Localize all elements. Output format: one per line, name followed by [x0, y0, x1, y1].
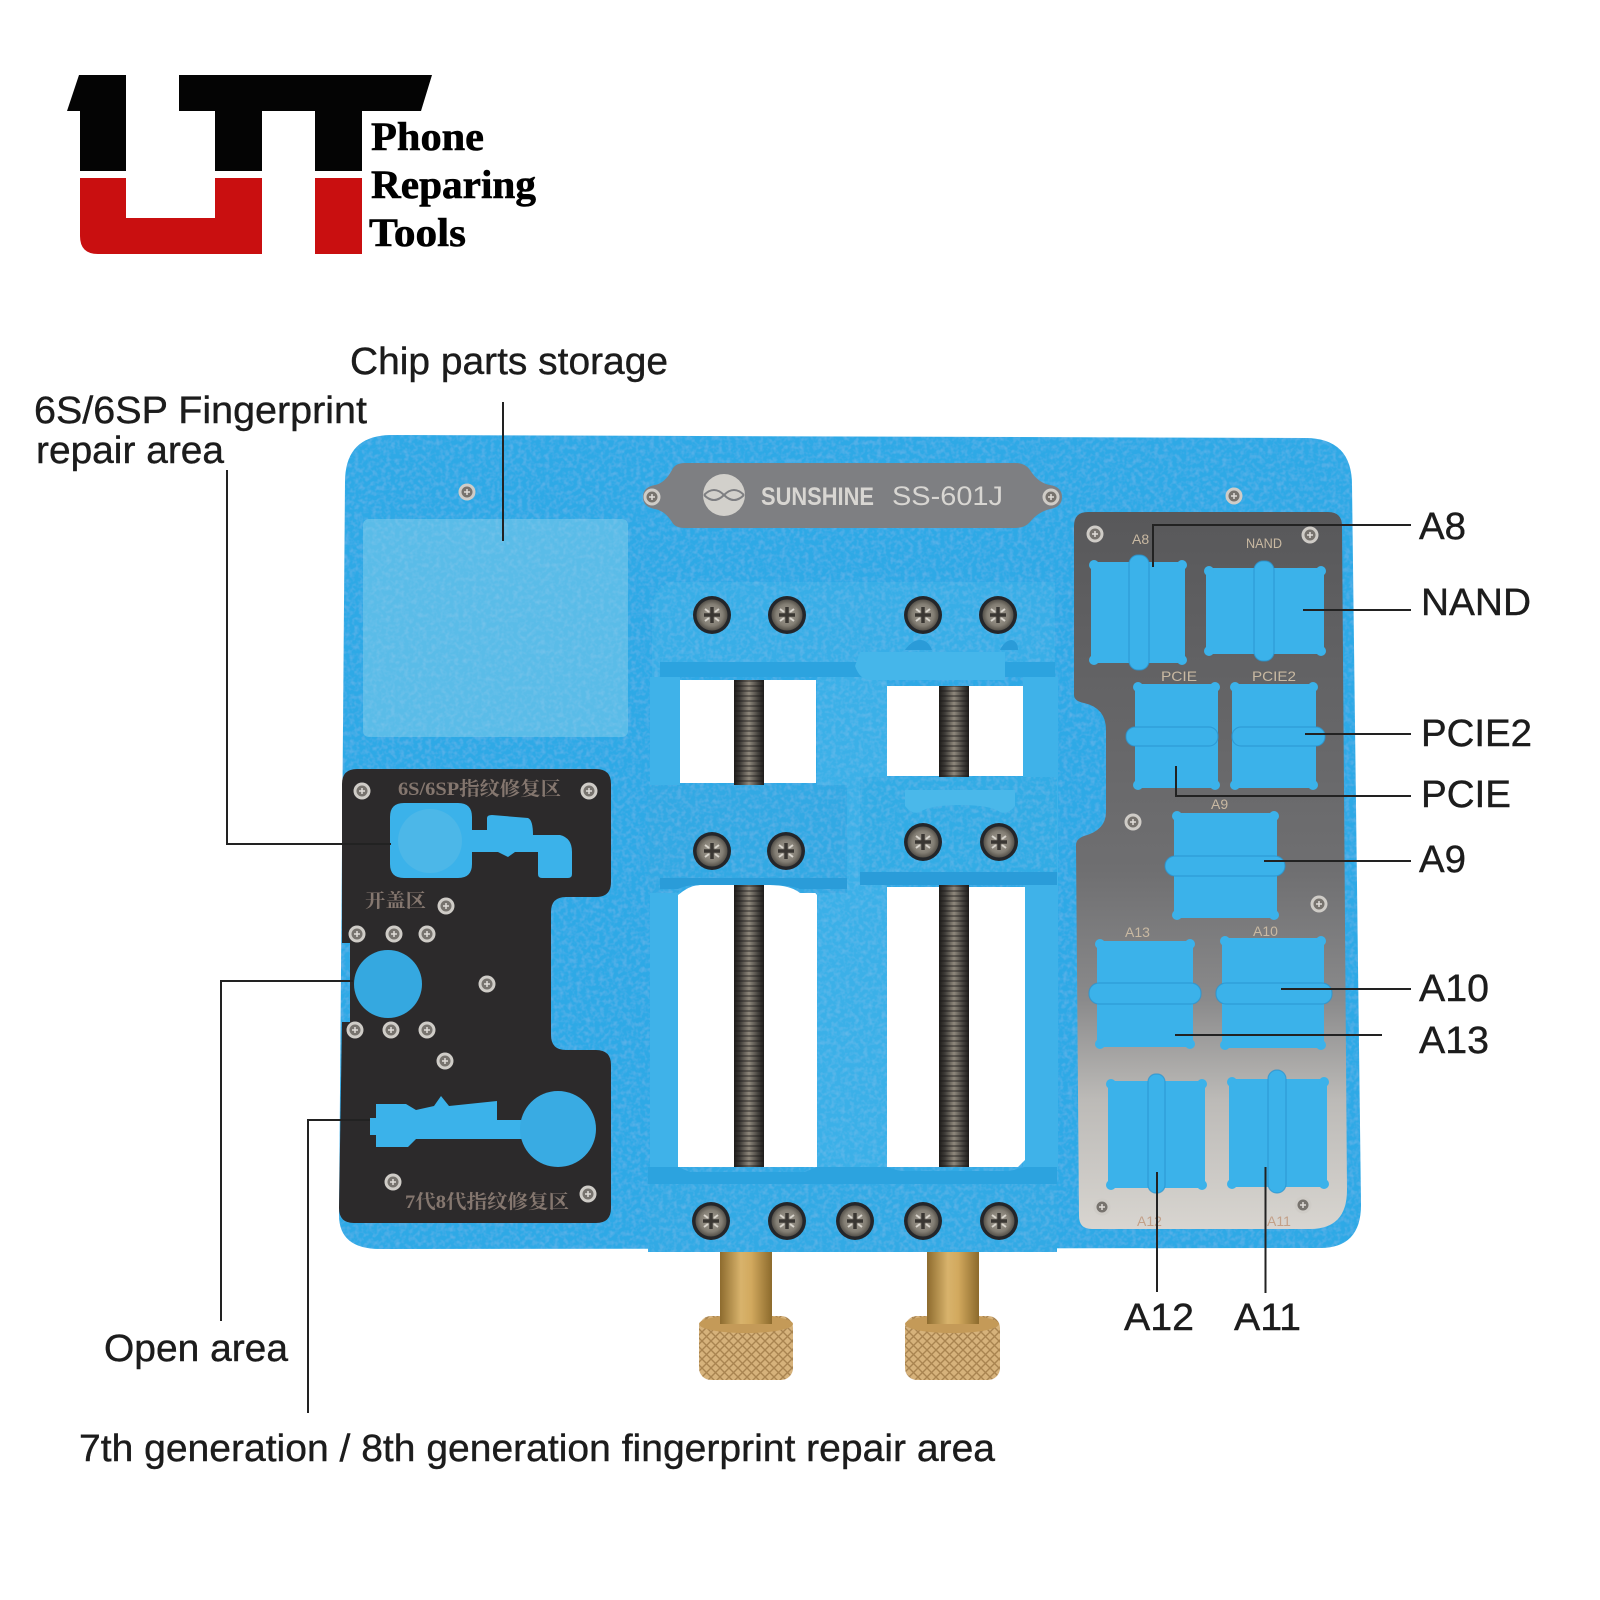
lead screw left [734, 680, 764, 1170]
nameplate text: model: SS-601J [892, 481, 1003, 511]
logo text: Tools: Tools [369, 210, 466, 255]
label: open area [104, 981, 353, 1370]
vise middle jaw left [648, 785, 847, 893]
label: A11: A11 [1234, 1297, 1301, 1339]
socket: PCIE2 [1230, 668, 1325, 790]
label: NAND: NAND [1421, 582, 1531, 624]
label: open area: Open area [104, 1328, 289, 1370]
vise rails [650, 677, 1058, 1170]
socket: A11: A11 [1267, 1213, 1291, 1229]
panel: right chip plate [1074, 512, 1347, 1229]
logo [67, 75, 536, 255]
socket: PCIE [1126, 668, 1220, 790]
socket: NAND [1204, 535, 1326, 661]
label: A10: A10 [1419, 968, 1489, 1010]
socket: A8 [1089, 531, 1187, 670]
socket: A9 [1165, 796, 1285, 920]
label: chip parts storage: Chip parts storage [350, 341, 668, 383]
label: 6S/6SP fingerprint repair area: repair area [36, 430, 225, 472]
logo text: Phone: Phone [371, 114, 484, 159]
socket: A12 [1106, 1074, 1207, 1229]
label: 6S/6SP fingerprint repair area: 6S/6SP Fingerprint [34, 390, 367, 432]
socket: NAND: NAND [1246, 535, 1282, 551]
label: PCIE2: PCIE2 [1421, 713, 1532, 755]
plate text: 6S/6SP area: 6S/6SP指纹修复区 [398, 778, 561, 800]
vise top bar [652, 582, 1055, 680]
plate text: open area: 开盖区 [365, 890, 426, 912]
label: A8 [1153, 506, 1466, 567]
vise screws [692, 596, 1018, 1240]
label: 6S/6SP fingerprint repair area [34, 390, 391, 844]
socket: PCIE: PCIE [1161, 668, 1197, 684]
panel: vise windows [678, 680, 1025, 1172]
brass knob left [699, 1252, 793, 1380]
plate screws [1086, 526, 1328, 1216]
label: A13: A13 [1419, 1020, 1489, 1062]
label: PCIE: PCIE [1421, 774, 1511, 816]
cutout: 6S fingerprint button [390, 803, 572, 878]
socket: A10 [1216, 923, 1332, 1050]
socket: A9: A9 [1211, 796, 1228, 812]
plate screws [346, 782, 598, 1202]
nameplate [643, 463, 1062, 528]
socket: A8: A8 [1132, 531, 1149, 547]
socket: A10: A10 [1253, 923, 1278, 939]
label: 7th/8th generation fingerprint repair area [79, 1120, 996, 1470]
cutout: open area circle [354, 950, 422, 1018]
vise bottom bar [648, 1167, 1057, 1252]
board pins [458, 484, 1242, 504]
jig board [339, 435, 1361, 1380]
logo: red letters [80, 178, 362, 254]
nameplate screws [644, 488, 1060, 506]
panel: chip parts storage [363, 519, 628, 737]
socket: A12: A12 [1137, 1213, 1162, 1229]
vise middle jaw right [860, 777, 1057, 885]
label: 7th/8th generation fingerprint repair area: 7th generation / 8th generation fingerprint repair area [79, 1428, 996, 1470]
socket: A13 [1089, 924, 1201, 1049]
socket: PCIE2: PCIE2 [1252, 668, 1296, 684]
label: A12: A12 [1124, 1297, 1194, 1339]
icon: sunshine logo [703, 474, 745, 516]
label: A8: A8 [1419, 506, 1466, 548]
logo: black letters [67, 75, 432, 171]
brass knob right [905, 1252, 1000, 1380]
logo text: Reparing: Reparing [371, 162, 536, 207]
vise rib [817, 677, 887, 1172]
socket: A11 [1227, 1070, 1329, 1229]
label: A9: A9 [1419, 839, 1466, 881]
nameplate text: brand: SUNSHINE [761, 483, 874, 511]
plate text: 7/8 area: 7代8代指纹修复区 [405, 1191, 569, 1213]
socket: A13: A13 [1125, 924, 1150, 940]
panel: left fingerprint plate [339, 769, 611, 1223]
cutout: 7/8 fingerprint key [370, 1091, 596, 1167]
label: PCIE [1176, 766, 1511, 816]
lead screw right [939, 686, 969, 1170]
